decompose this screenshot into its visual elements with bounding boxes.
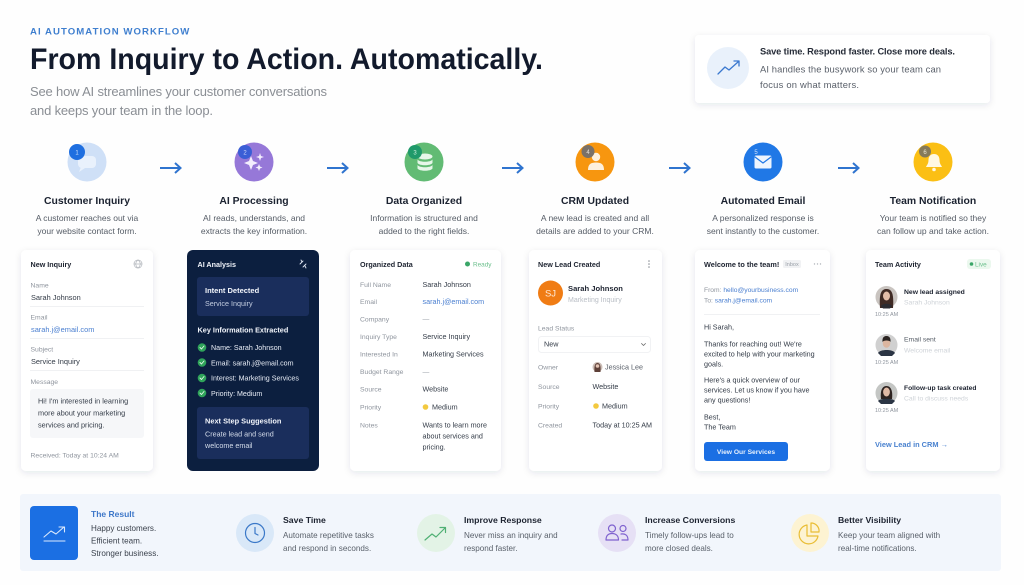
icon: globe xyxy=(134,260,142,268)
panel: email: excited to help with your marketing xyxy=(704,350,815,358)
arrow xyxy=(160,163,180,173)
step 3: data organized xyxy=(370,142,478,236)
checklist: Interest: Marketing Services xyxy=(211,374,299,382)
lead avatar: SJ xyxy=(545,288,556,300)
description: sent instantly to the customer. xyxy=(707,226,819,236)
panel: email: Here's a quick overview of our xyxy=(704,376,801,384)
icon: envelope: 5 xyxy=(754,150,758,156)
panel: email: Welcome to the team! xyxy=(704,260,779,269)
panel: new inquiry form: Subject xyxy=(30,346,53,354)
more dots xyxy=(814,263,821,265)
icon: database: 3 xyxy=(413,150,417,156)
activity 1 xyxy=(875,286,965,318)
description: A customer reaches out via xyxy=(36,213,139,223)
live badge: Live xyxy=(975,262,987,268)
icon: chat bubbles: 1 xyxy=(75,150,79,156)
message box: more about your marketing xyxy=(38,408,125,418)
button: View Our Services xyxy=(717,449,775,456)
panel: new inquiry form: Received: Today at 10:24 AM xyxy=(30,452,119,460)
subtitle: See how AI streamlines your customer conversations xyxy=(30,84,328,99)
benefit: better visibility xyxy=(791,514,940,553)
benefit: improve response xyxy=(417,514,558,553)
activity 2 xyxy=(875,334,951,366)
benefit: increase conversions: Increase Conversions xyxy=(645,515,735,525)
benefit: increase conversions: Timely follow-ups lead to xyxy=(645,531,734,540)
step 5: automated email xyxy=(707,142,819,236)
next step box: welcome email xyxy=(204,441,253,450)
panel: organized data: about services and xyxy=(422,432,483,440)
panel: organized data: Interested In xyxy=(360,352,398,358)
panel: results band xyxy=(20,494,1001,571)
benefit: better visibility: Better Visibility xyxy=(838,515,901,525)
icon: person: 4 xyxy=(586,150,590,156)
arrow xyxy=(838,163,858,173)
step 4: crm updated xyxy=(536,142,654,236)
panel: email: goals. xyxy=(704,360,723,368)
step 6: team notification xyxy=(877,142,989,236)
panel: organized data: Website xyxy=(422,384,448,394)
panel: new inquiry form: Name xyxy=(30,282,49,290)
description: Information is structured and xyxy=(370,213,478,223)
step 6: team notification: Team Notification xyxy=(890,196,976,207)
panel: team activity xyxy=(866,250,1000,471)
panel: email: The Team xyxy=(704,422,736,432)
panel: new lead created: Jessica Lee xyxy=(605,362,643,372)
checklist: Priority: Medium xyxy=(211,390,262,398)
result text: Happy customers. xyxy=(91,524,156,533)
subtitle: and keeps your team in the loop. xyxy=(30,103,213,118)
activity 3: Follow-up task created xyxy=(904,385,976,392)
panel: new lead created: Created xyxy=(538,422,562,430)
ready badge: Ready xyxy=(473,262,492,268)
checklist xyxy=(198,343,299,398)
panel: organized data: Organized Data xyxy=(360,260,414,269)
activity 1: 10:25 AM xyxy=(875,312,899,318)
activity 1: Sarah Johnson xyxy=(904,300,950,306)
result text xyxy=(91,509,158,558)
description: Your team is notified so they xyxy=(880,213,987,223)
panel: new inquiry form: Email xyxy=(30,314,48,322)
description: can follow up and take action. xyxy=(877,226,989,236)
description: AI reads, understands, and xyxy=(203,213,305,223)
panel: new lead created: Source xyxy=(538,384,560,391)
panel: organized data: sarah.j@email.com xyxy=(422,297,484,306)
callout text: AI handles the busywork so your team can xyxy=(760,64,941,74)
panel: new inquiry form: Sarah Johnson xyxy=(31,293,81,302)
benefit: better visibility: Keep your team aligned with xyxy=(838,531,940,540)
panel: email: Thanks for reaching out! We're xyxy=(704,340,802,348)
description: A personalized response is xyxy=(712,213,814,223)
owner avatar xyxy=(592,362,602,372)
description: added to the right fields. xyxy=(379,226,469,236)
live badge xyxy=(967,259,991,269)
panel: organized data: pricing. xyxy=(422,442,446,452)
intent box: Service Inquiry xyxy=(205,299,253,308)
icon: sparkle xyxy=(300,260,306,268)
checklist: Name: Sarah Johnson xyxy=(211,344,282,352)
benefit: save time: Automate repetitive tasks xyxy=(283,531,374,540)
description xyxy=(201,213,307,236)
benefit: improve response: respond faster. xyxy=(464,544,518,553)
inbox badge: Inbox xyxy=(785,262,799,268)
benefit: increase conversions xyxy=(598,514,735,553)
arrow xyxy=(502,163,522,173)
step 1: customer inquiry xyxy=(36,142,139,236)
benefit: increase conversions: more closed deals. xyxy=(645,544,713,553)
callout text: focus on what matters. xyxy=(760,79,859,90)
panel: new lead created: Priority xyxy=(538,404,560,410)
panel: new lead created: Marketing Inquiry xyxy=(568,297,622,304)
benefit: improve response: Never miss an inquiry and xyxy=(464,531,558,540)
checklist: Email: sarah.j@email.com xyxy=(211,360,294,368)
panel: new lead created: Today at 10:25 AM xyxy=(592,420,652,430)
callout text: Save time. Respond faster. Close more deals. xyxy=(760,46,955,56)
icon: sparkles: 2 xyxy=(243,150,247,156)
inbox badge xyxy=(783,260,801,268)
description xyxy=(370,213,478,236)
title: From Inquiry to Action. Automatically. xyxy=(30,43,543,76)
message box xyxy=(30,389,144,438)
panel: new inquiry form xyxy=(21,250,153,471)
panel: organized data: — xyxy=(422,369,430,376)
panel: ai analysis: AI Analysis xyxy=(198,260,236,269)
panel: new inquiry form: Message xyxy=(30,379,58,386)
panel: organized data: — xyxy=(422,316,430,324)
description: your website contact form. xyxy=(37,226,137,236)
panel: email: To: sarah.j@email.com xyxy=(704,298,773,304)
benefit: save time: and respond in seconds. xyxy=(283,544,371,553)
callout: save time xyxy=(695,35,990,103)
step 5: automated email: Automated Email xyxy=(721,196,806,207)
button xyxy=(704,442,788,461)
panel: email: Hi Sarah, xyxy=(704,322,734,332)
panel: email: From: hello@yourbusiness.com xyxy=(704,287,799,294)
panel: organized data: Source xyxy=(360,386,382,394)
intent box: Intent Detected xyxy=(205,286,260,295)
panel: email: services. Let us know if you have xyxy=(704,386,809,394)
panel: new lead created: Website xyxy=(592,382,618,391)
activity 2: Email sent xyxy=(904,336,936,344)
activity 3: Call to discuss needs xyxy=(904,396,969,402)
activity 2: 10:25 AM xyxy=(875,360,899,366)
activity 1: New lead assigned xyxy=(904,289,965,296)
arrow xyxy=(327,163,348,173)
panel: ai analysis xyxy=(187,250,319,471)
crm link: View Lead in CRM → xyxy=(875,440,948,449)
panel: organized data xyxy=(350,250,501,471)
icon: result chart xyxy=(30,506,78,560)
panel: new lead created: Lead Status xyxy=(538,326,575,332)
benefit: improve response: Improve Response xyxy=(464,515,542,525)
panel: email: any questions! xyxy=(704,396,750,404)
panel: organized data: Company xyxy=(360,316,390,324)
status select xyxy=(538,336,650,352)
panel: organized data: Service Inquiry xyxy=(422,332,470,341)
description xyxy=(536,213,654,236)
menu dots xyxy=(648,260,650,268)
description xyxy=(877,213,989,236)
result text: Stronger business. xyxy=(91,549,158,558)
description: A new lead is created and all xyxy=(541,213,649,223)
step 2: ai processing: AI Processing xyxy=(219,196,289,207)
benefit: better visibility: real-time notifications. xyxy=(838,544,917,553)
panel: ai analysis: Key Information Extracted xyxy=(198,326,288,334)
step 3: data organized: Data Organized xyxy=(386,196,462,207)
next step box xyxy=(197,407,309,459)
ready badge xyxy=(465,262,492,268)
result text: The Result xyxy=(91,509,135,519)
panel: organized data: Notes xyxy=(360,422,378,430)
panel: organized data: Wants to learn more xyxy=(422,420,487,430)
step 2: ai processing xyxy=(201,142,307,236)
message box: Hi! I'm interested in learning xyxy=(38,396,128,406)
panel: organized data: Budget Range xyxy=(360,369,404,376)
panel: new inquiry form: Service Inquiry xyxy=(31,357,80,366)
panel: new lead created: Medium xyxy=(602,402,628,410)
benefit: save time xyxy=(236,514,374,553)
panel: organized data: Email xyxy=(360,299,377,306)
icon: bell: 6 xyxy=(923,150,927,156)
icon: trend line xyxy=(707,47,749,89)
step 4: crm updated: CRM Updated xyxy=(561,196,629,207)
panel: organized data: Medium xyxy=(432,402,458,412)
panel: new inquiry form: sarah.j@email.com xyxy=(31,325,94,334)
activity 3 xyxy=(875,382,976,414)
panel: new lead created: Sarah Johnson xyxy=(568,284,623,293)
panel: organized data: Marketing Services xyxy=(422,350,484,358)
activity 2: Welcome email xyxy=(904,348,951,354)
intent box xyxy=(197,277,309,316)
panel: email: Best, xyxy=(704,412,720,422)
activity 3: 10:25 AM xyxy=(875,408,899,414)
next step box: Create lead and send xyxy=(205,430,274,438)
panel: team activity: Team Activity xyxy=(875,260,921,269)
panel: new inquiry form: New Inquiry xyxy=(30,260,71,269)
lead avatar xyxy=(538,280,563,306)
description xyxy=(707,213,819,236)
benefit: save time: Save Time xyxy=(283,515,326,525)
panel: new lead created: Owner xyxy=(538,364,559,372)
panel: new lead created: New Lead Created xyxy=(538,260,600,269)
step 1: customer inquiry: Customer Inquiry xyxy=(44,196,130,207)
panel: new lead created xyxy=(529,250,662,471)
arrow xyxy=(669,163,690,173)
description xyxy=(36,213,139,236)
description: extracts the key information. xyxy=(201,226,307,236)
panel: organized data: Sarah Johnson xyxy=(422,280,471,289)
result text: Efficient team. xyxy=(91,536,142,546)
panel: email xyxy=(695,250,830,471)
panel: organized data: Inquiry Type xyxy=(360,334,397,341)
next step box: Next Step Suggestion xyxy=(205,416,282,426)
panel: organized data: Priority xyxy=(360,404,382,412)
panel: organized data: Full Name xyxy=(360,282,391,289)
eyebrow label: AI AUTOMATION WORKFLOW xyxy=(30,26,190,38)
subtitle xyxy=(30,84,328,118)
message box: services and pricing. xyxy=(38,420,105,430)
status select: New xyxy=(544,340,559,348)
description: details are added to your CRM. xyxy=(536,226,654,236)
callout text xyxy=(760,46,955,90)
